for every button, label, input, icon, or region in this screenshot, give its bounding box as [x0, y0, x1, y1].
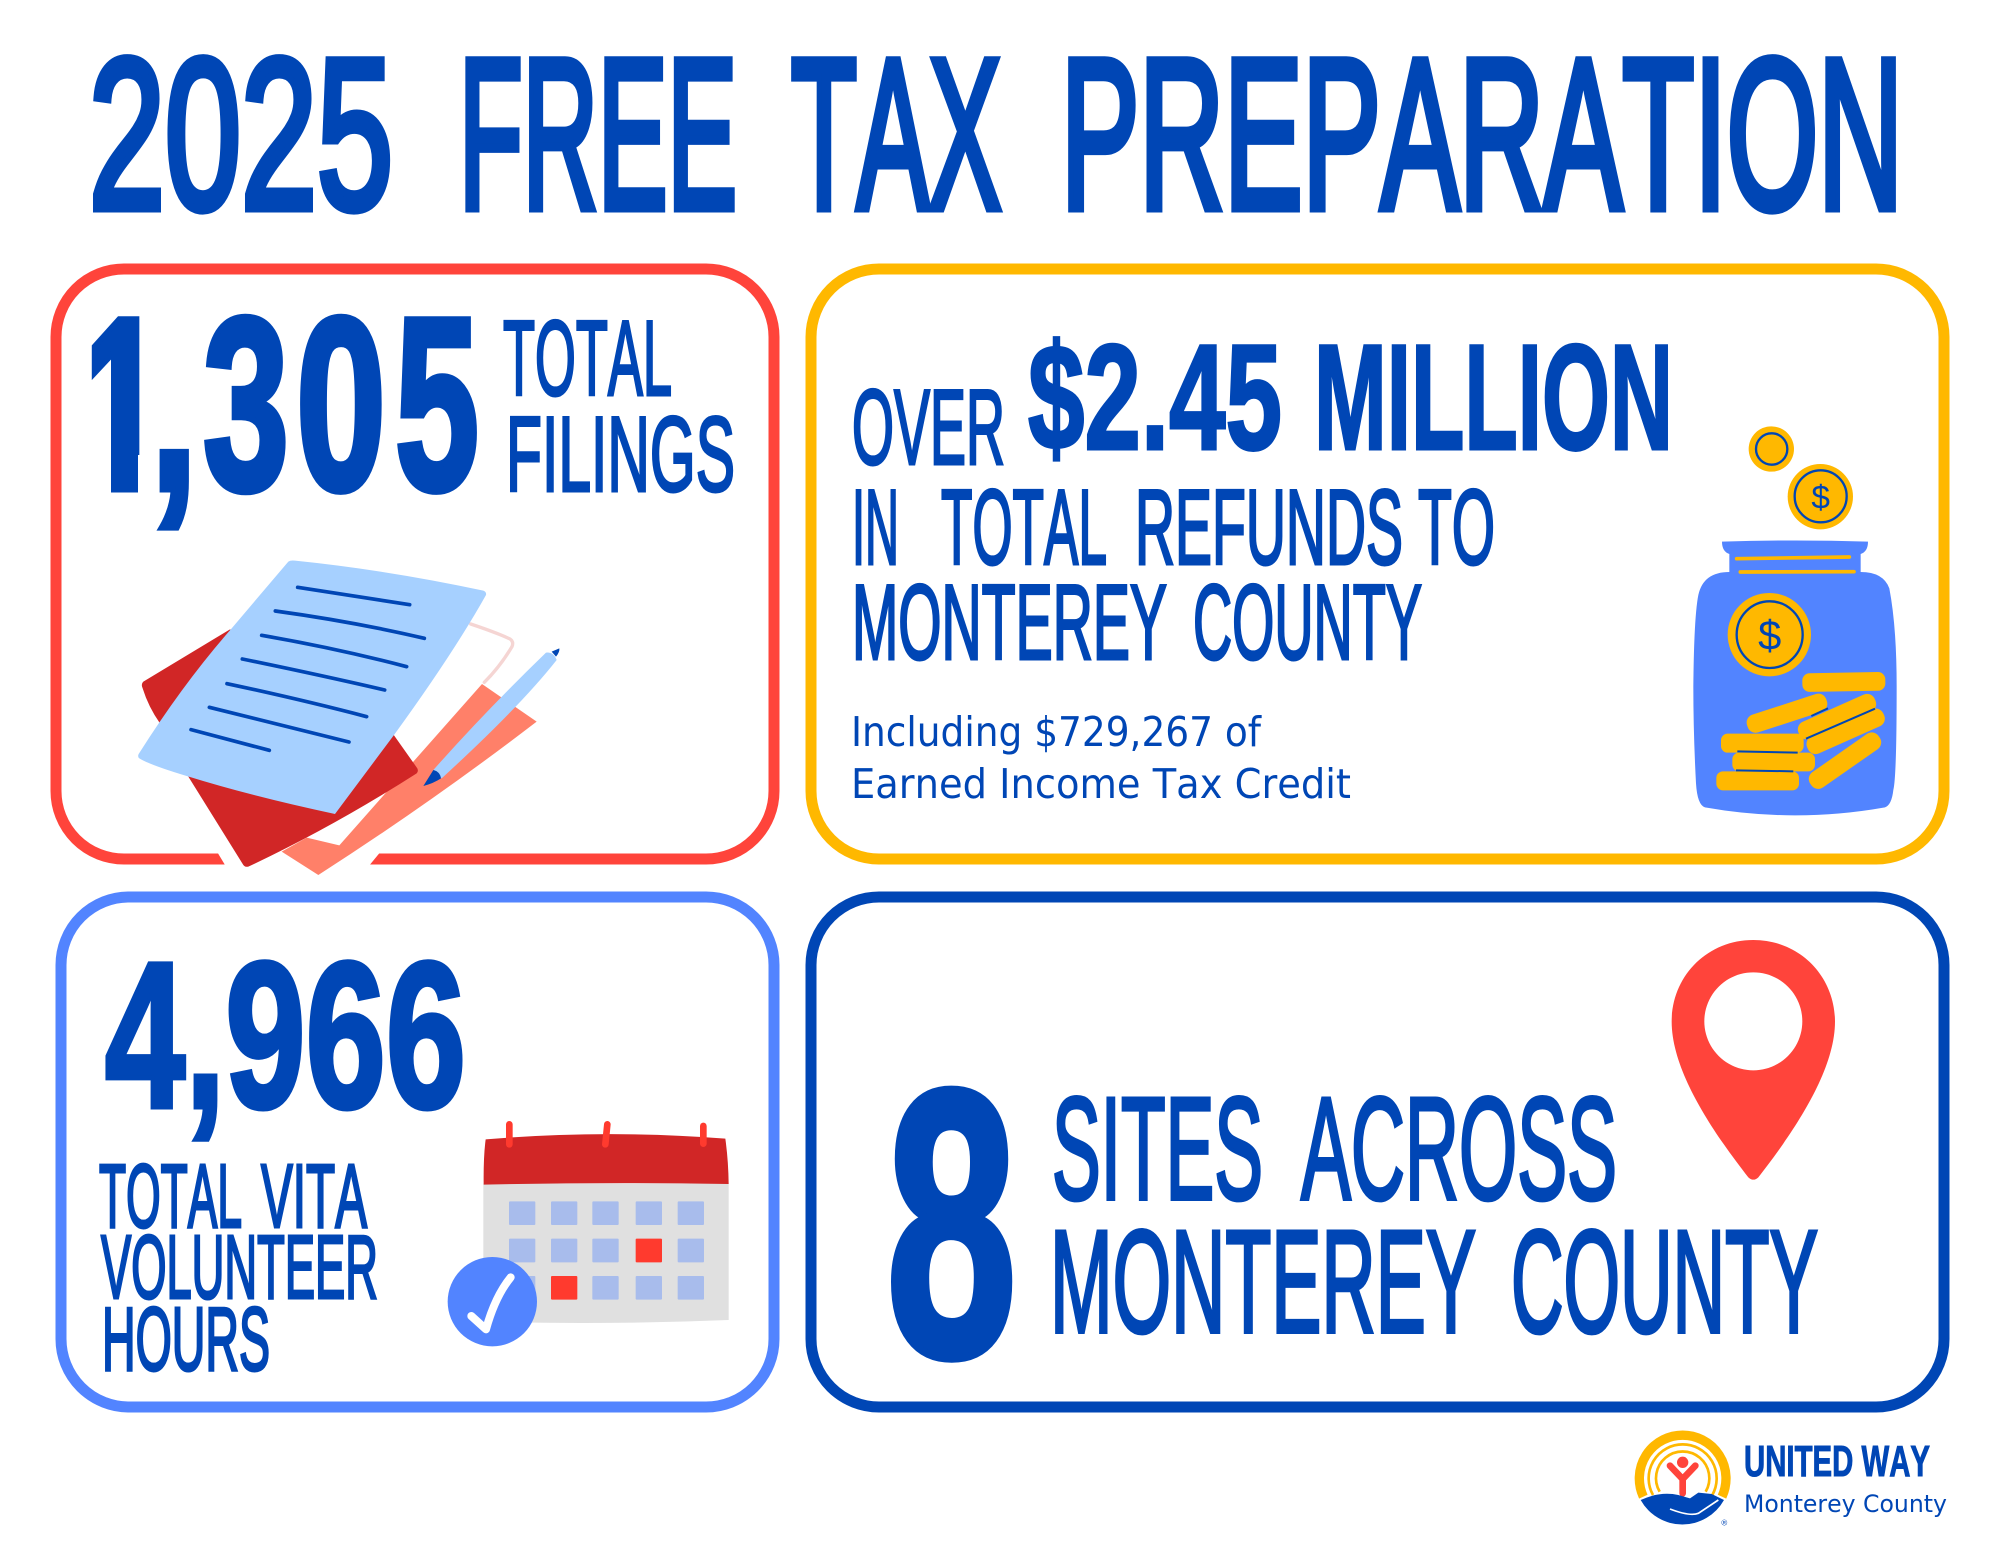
label: total filings	[503, 298, 735, 514]
label: total filings: TOTAL	[503, 298, 672, 418]
stat: $2.45 million	[1028, 313, 1673, 481]
label: total vita volunteer hours: VITA	[261, 1147, 367, 1247]
text: in total refunds to monterey county: MONTEREY	[852, 562, 1167, 682]
label: total vita volunteer hours: HOURS	[102, 1290, 270, 1390]
icon: coin jar: $	[1758, 611, 1781, 658]
stat: 1,305: 3	[203, 267, 289, 542]
logo mark: ®	[1721, 1518, 1727, 1527]
stat: 1,305: 0	[296, 267, 386, 542]
label: total vita volunteer hours	[99, 1147, 378, 1390]
panel: total filings	[56, 267, 774, 875]
panel: volunteer hours	[61, 897, 774, 1407]
panel border	[56, 269, 774, 859]
label: sites across monterey county: SITES	[1052, 1067, 1263, 1230]
stat: 8: 8	[886, 1011, 1017, 1436]
icon: calendar with check	[448, 1124, 729, 1346]
text: in total refunds to monterey county: TOTAL	[941, 467, 1107, 587]
text: earned income tax credit: Earned Income Tax Credit	[851, 760, 1351, 808]
text: in total refunds to monterey county: IN	[852, 467, 899, 587]
label: total filings: FILINGS	[506, 394, 735, 514]
title: TAX	[791, 15, 1001, 254]
label: total vita volunteer hours: VOLUNTEER	[101, 1218, 378, 1318]
logo: united way monterey county	[1639, 1435, 1947, 1527]
label: over: OVER	[852, 367, 1005, 487]
text: in total refunds to monterey county: REFUNDS	[1135, 467, 1403, 587]
text: in total refunds to monterey county: COUNTY	[1193, 562, 1422, 682]
icon: location pin	[1672, 940, 1835, 1180]
label: total vita volunteer hours: TOTAL	[99, 1147, 242, 1247]
panel border	[61, 897, 774, 1407]
title	[89, 15, 1903, 254]
text: in total refunds to monterey county	[852, 467, 1495, 682]
label: sites across monterey county: MONTEREY	[1050, 1200, 1476, 1363]
text: in total refunds to monterey county: TO	[1418, 467, 1495, 587]
icon: coin jar	[1693, 426, 1897, 815]
stat: 1,305: 1	[84, 267, 164, 542]
panel border	[811, 269, 1944, 859]
panel: refunds	[811, 269, 1944, 859]
label: sites across monterey county: ACROSS	[1301, 1067, 1617, 1230]
stat: 1,305	[84, 267, 479, 542]
logo mark	[1639, 1435, 1727, 1527]
panel: sites	[811, 897, 1944, 1436]
title: 2025	[89, 15, 393, 254]
stat: $2.45 million: $2.45	[1028, 313, 1282, 481]
icon: documents and pen	[138, 560, 559, 875]
icon: coin jar: $	[1811, 479, 1830, 516]
logo subtitle: Monterey County	[1744, 1490, 1947, 1518]
stat: 1,305: 5	[395, 267, 479, 542]
text: earned income tax credit	[851, 708, 1351, 808]
label: sites across monterey county	[1050, 1067, 1818, 1363]
title: FREE	[459, 15, 737, 254]
panel border	[811, 897, 1944, 1407]
stat: 4,966: 4,966	[105, 920, 466, 1152]
stat: $2.45 million: MILLION	[1314, 313, 1673, 481]
stat: 1,305: ,	[150, 267, 198, 542]
text: earned income tax credit: Including $729,267 of	[851, 708, 1262, 756]
